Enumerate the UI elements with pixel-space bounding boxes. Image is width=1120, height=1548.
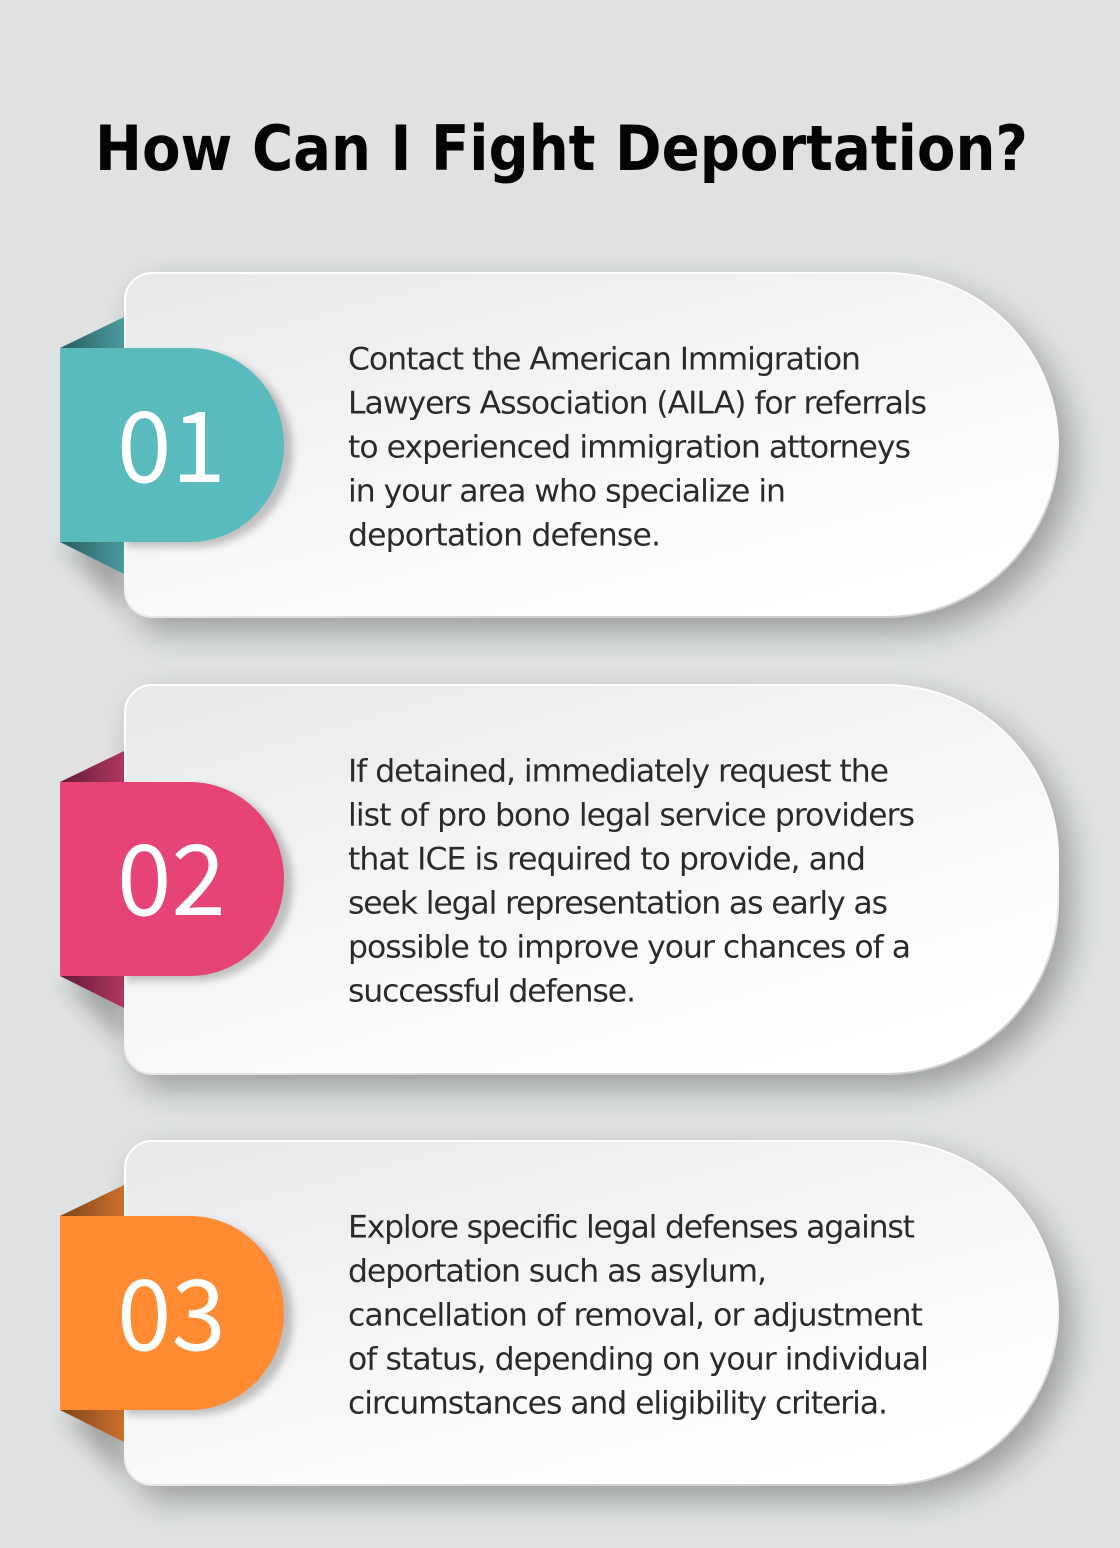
body text 02: If detained, immediately request the bbox=[348, 754, 889, 790]
tab shadow 01 bbox=[126, 353, 293, 547]
body text 02: seek legal representation as early as bbox=[348, 886, 888, 922]
number 02: 02 bbox=[117, 802, 226, 944]
ribbon fold bottom 03 bbox=[60, 1410, 124, 1442]
number tab 01 bbox=[60, 348, 284, 542]
body text 02 bbox=[348, 754, 915, 1010]
card 02 bbox=[125, 685, 1058, 1074]
body text 02: successful defense. bbox=[348, 974, 636, 1010]
body text 01: Lawyers Association (AILA) for referrals bbox=[348, 386, 927, 422]
body text 03: deportation such as asylum, bbox=[348, 1254, 767, 1290]
number tab 02 bbox=[60, 782, 284, 976]
panel: step 02 bbox=[60, 685, 1071, 1089]
ribbon fold top 01 bbox=[60, 317, 124, 348]
body text 01: to experienced immigration attorneys bbox=[348, 430, 911, 466]
panel: step 03 bbox=[60, 1141, 1071, 1500]
tab shadow 02 bbox=[126, 787, 293, 981]
ribbon fold bottom 02 bbox=[60, 976, 124, 1008]
body text 03: Explore specific legal defenses against bbox=[348, 1210, 915, 1246]
body text 03: of status, depending on your individual bbox=[348, 1342, 929, 1378]
body text 03: cancellation of removal, or adjustment bbox=[348, 1298, 923, 1334]
card 03 bbox=[125, 1141, 1058, 1485]
tab shadow 03 bbox=[126, 1221, 293, 1415]
body text 01: deportation defense. bbox=[348, 518, 661, 554]
body text 02: list of pro bono legal service providers bbox=[348, 798, 915, 834]
body text 01: in your area who specialize in bbox=[348, 474, 786, 510]
panel: step 01 bbox=[60, 273, 1071, 632]
number 03: 03 bbox=[117, 1237, 226, 1379]
body text 02: possible to improve your chances of a bbox=[348, 930, 911, 966]
body text 03 bbox=[348, 1210, 929, 1422]
ribbon fold bottom 01 bbox=[60, 542, 124, 574]
body text 02: that ICE is required to provide, and bbox=[348, 842, 866, 878]
body text 01: Contact the American Immigration bbox=[348, 342, 861, 378]
number 01: 01 bbox=[117, 369, 226, 511]
card 01 bbox=[125, 273, 1058, 617]
title: How Can I Fight Deportation? bbox=[95, 112, 1028, 185]
number tab 03 bbox=[60, 1216, 284, 1410]
ribbon fold top 02 bbox=[60, 751, 124, 782]
body text 03: circumstances and eligibility criteria. bbox=[348, 1386, 888, 1422]
ribbon fold top 03 bbox=[60, 1185, 124, 1216]
body text 01 bbox=[348, 342, 927, 554]
